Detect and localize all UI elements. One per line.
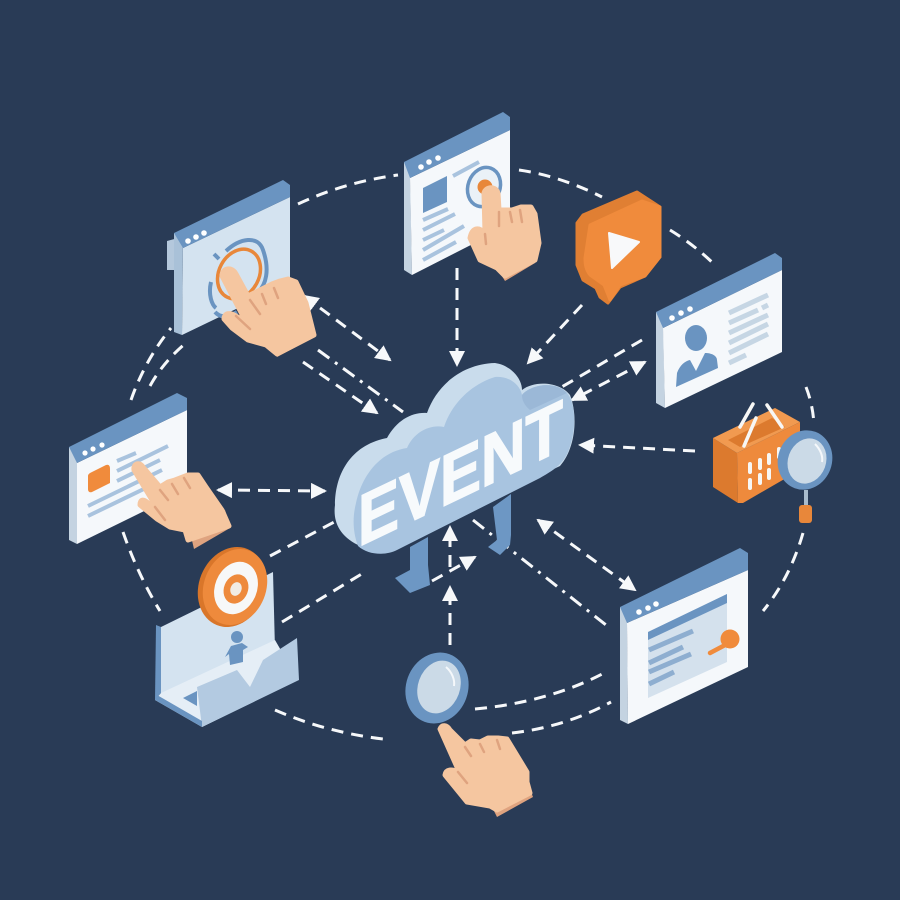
arrow: cloud to bottom-right window, two-way <box>538 520 635 590</box>
connector: profile window to cloud <box>560 340 642 388</box>
panel: bottom-right window <box>620 548 748 724</box>
hand <box>470 188 539 281</box>
hand <box>222 269 314 357</box>
arrow: upward into cloud <box>448 527 452 567</box>
folder back panel <box>161 572 275 700</box>
cloud upper right bump <box>522 385 567 410</box>
window side <box>69 447 77 544</box>
arrow: left window to cloud, two-way <box>218 490 325 491</box>
image block <box>423 176 447 213</box>
arrow: magnifier upward <box>448 587 452 645</box>
connector: folder to cloud <box>282 572 365 622</box>
icon: orange basket <box>713 404 800 503</box>
outer dashed ring <box>123 170 814 739</box>
cloud support legs <box>395 494 511 593</box>
icon: magnifier on basket <box>769 423 841 523</box>
basket slot <box>728 418 785 447</box>
window dots <box>636 601 659 615</box>
connector: target to cloud <box>270 520 338 556</box>
cloud with EVENT label <box>335 363 575 593</box>
connector: top-left window to cloud <box>318 350 403 412</box>
inner panel header <box>648 594 727 640</box>
hand: bottom pointer <box>440 726 533 817</box>
inner panel <box>648 594 727 698</box>
arrow: play bubble to cloud <box>528 305 582 363</box>
arrow: top-left window to cloud <box>303 362 377 413</box>
window header <box>174 180 290 248</box>
arrow: diagonal into right support <box>432 557 475 581</box>
folder front panel <box>197 638 299 727</box>
cloud front face <box>354 377 574 554</box>
window dots <box>82 442 105 456</box>
window dots <box>669 306 693 321</box>
EVENT text: EVENT <box>358 385 563 563</box>
window body <box>663 270 782 408</box>
folder floor shadow <box>183 691 197 706</box>
play triangle <box>609 233 639 268</box>
arrow: basket to cloud <box>580 445 695 451</box>
orange image <box>88 465 110 492</box>
connector: cloud to bottom-right window <box>473 520 606 625</box>
text lines <box>729 295 768 363</box>
window header <box>69 393 187 463</box>
window body <box>182 197 290 335</box>
click target <box>462 163 506 211</box>
basket grid <box>750 449 779 488</box>
window header <box>620 548 748 623</box>
window body <box>77 410 187 544</box>
folder left edge <box>155 625 161 700</box>
window body <box>627 570 748 724</box>
orange key <box>710 630 740 653</box>
panel: top-left click window <box>167 180 314 357</box>
text lines <box>423 162 479 260</box>
panel: folder with target <box>155 537 299 727</box>
cloud back layer <box>335 363 575 553</box>
window dots <box>418 155 441 170</box>
arrow: top-left window to cloud, two-way <box>304 296 390 360</box>
folder person <box>225 631 248 665</box>
panel: left window <box>69 393 230 549</box>
panel: top centre click window <box>404 112 539 281</box>
icon: bottom magnifier <box>396 644 478 732</box>
folder bottom edge <box>155 695 202 727</box>
window body <box>410 130 510 275</box>
panel: profile window <box>656 253 782 408</box>
window tab <box>167 238 178 270</box>
window header <box>404 112 510 178</box>
target <box>186 537 278 637</box>
arrow: top window to cloud <box>456 268 458 365</box>
arrow: profile window to cloud, two-way <box>572 362 645 400</box>
folder base <box>155 640 298 727</box>
text lines <box>88 446 168 516</box>
window side <box>404 162 412 275</box>
icon: orange play bubble <box>577 192 660 303</box>
window header <box>656 253 782 328</box>
click rings <box>209 240 269 316</box>
window side <box>174 233 183 335</box>
inner text lines <box>649 631 693 684</box>
window side <box>656 312 665 408</box>
window side <box>620 607 628 724</box>
basket handles <box>740 404 782 446</box>
hand <box>134 464 230 549</box>
click dot <box>478 180 492 194</box>
window dots <box>185 230 207 244</box>
profile avatar <box>676 325 718 387</box>
